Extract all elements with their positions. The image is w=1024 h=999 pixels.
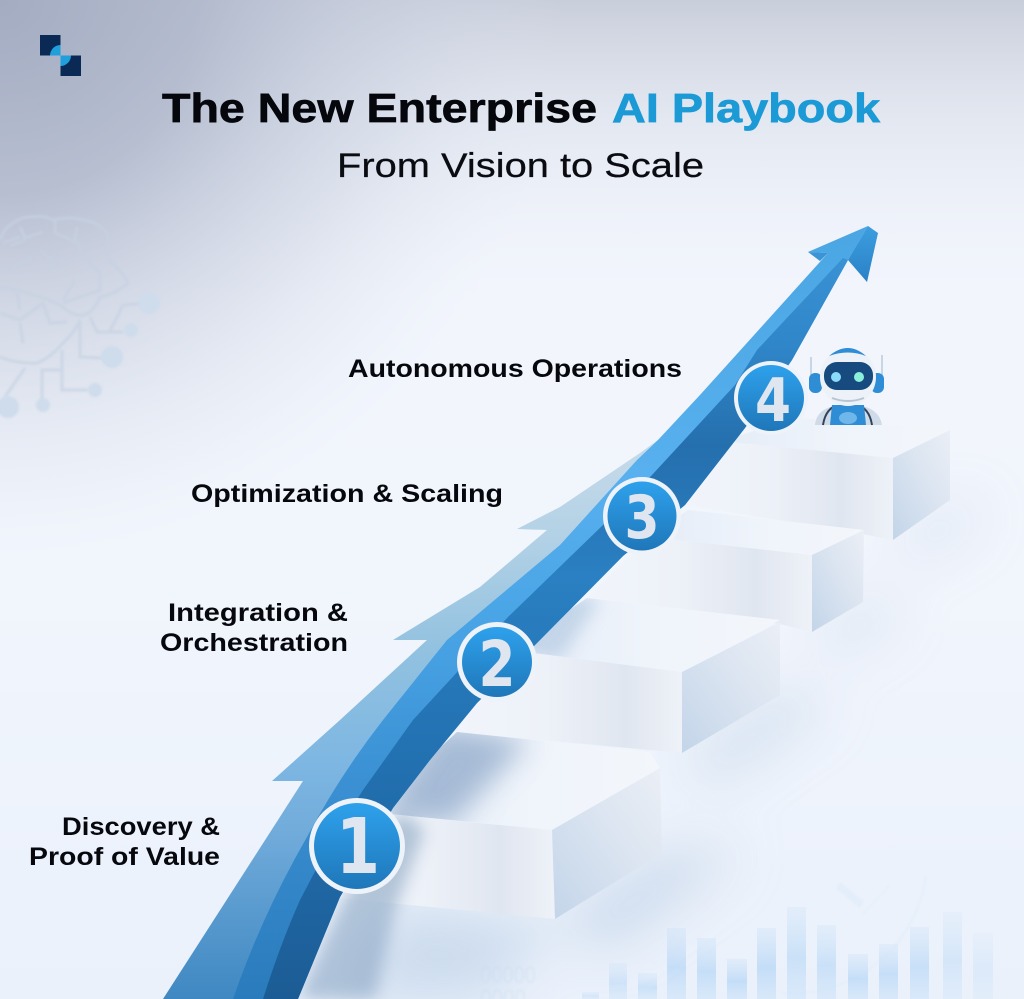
badge 4: 4: [755, 366, 791, 436]
step 3 block: [588, 510, 864, 632]
label: step 3: Optimization & Scaling: [191, 480, 503, 508]
title highlight: AI Playbook: [612, 85, 880, 131]
brain circuit watermark: [0, 216, 150, 400]
label: step 2: Orchestration: [160, 629, 348, 657]
background numbers: [480, 962, 536, 999]
arrow dark band: [263, 258, 848, 999]
badge 4: [734, 361, 808, 436]
arrow head side: [848, 226, 878, 282]
step 2 block: [534, 598, 780, 753]
badge 1: 1: [336, 803, 380, 892]
icon: robot: [809, 348, 884, 425]
logo: [40, 35, 81, 76]
arrow bright band: [233, 226, 868, 999]
label: step 1: Proof of Value: [29, 843, 220, 871]
floor shadows: [340, 505, 985, 999]
subtitle: From Vision to Scale: [337, 147, 704, 185]
circuit nodes: [0, 292, 160, 418]
badge 3: [603, 477, 681, 555]
background numbers: 00000: [480, 962, 536, 989]
label: step 1: [29, 813, 220, 871]
arrow cast shadow: [298, 810, 425, 999]
label: step 2: Integration &: [168, 599, 348, 627]
badge 2: 2: [478, 628, 516, 701]
label: step 4: Autonomous Operations: [348, 355, 682, 383]
badge 3: 3: [624, 483, 660, 553]
step 1 block: [391, 732, 656, 919]
step 4 block: [685, 418, 950, 540]
background bar chart: [582, 907, 993, 999]
growth arrow: [163, 226, 878, 999]
arrow barb underside: [808, 252, 828, 261]
label: step 1: Discovery &: [62, 813, 220, 841]
faint gauge arc: [780, 875, 926, 994]
badge 1: [309, 798, 405, 894]
arrow pale band with spikes: [163, 226, 878, 999]
badge 2: [457, 622, 537, 702]
label: step 2: [160, 599, 348, 657]
title: The New Enterprise: [162, 85, 597, 131]
